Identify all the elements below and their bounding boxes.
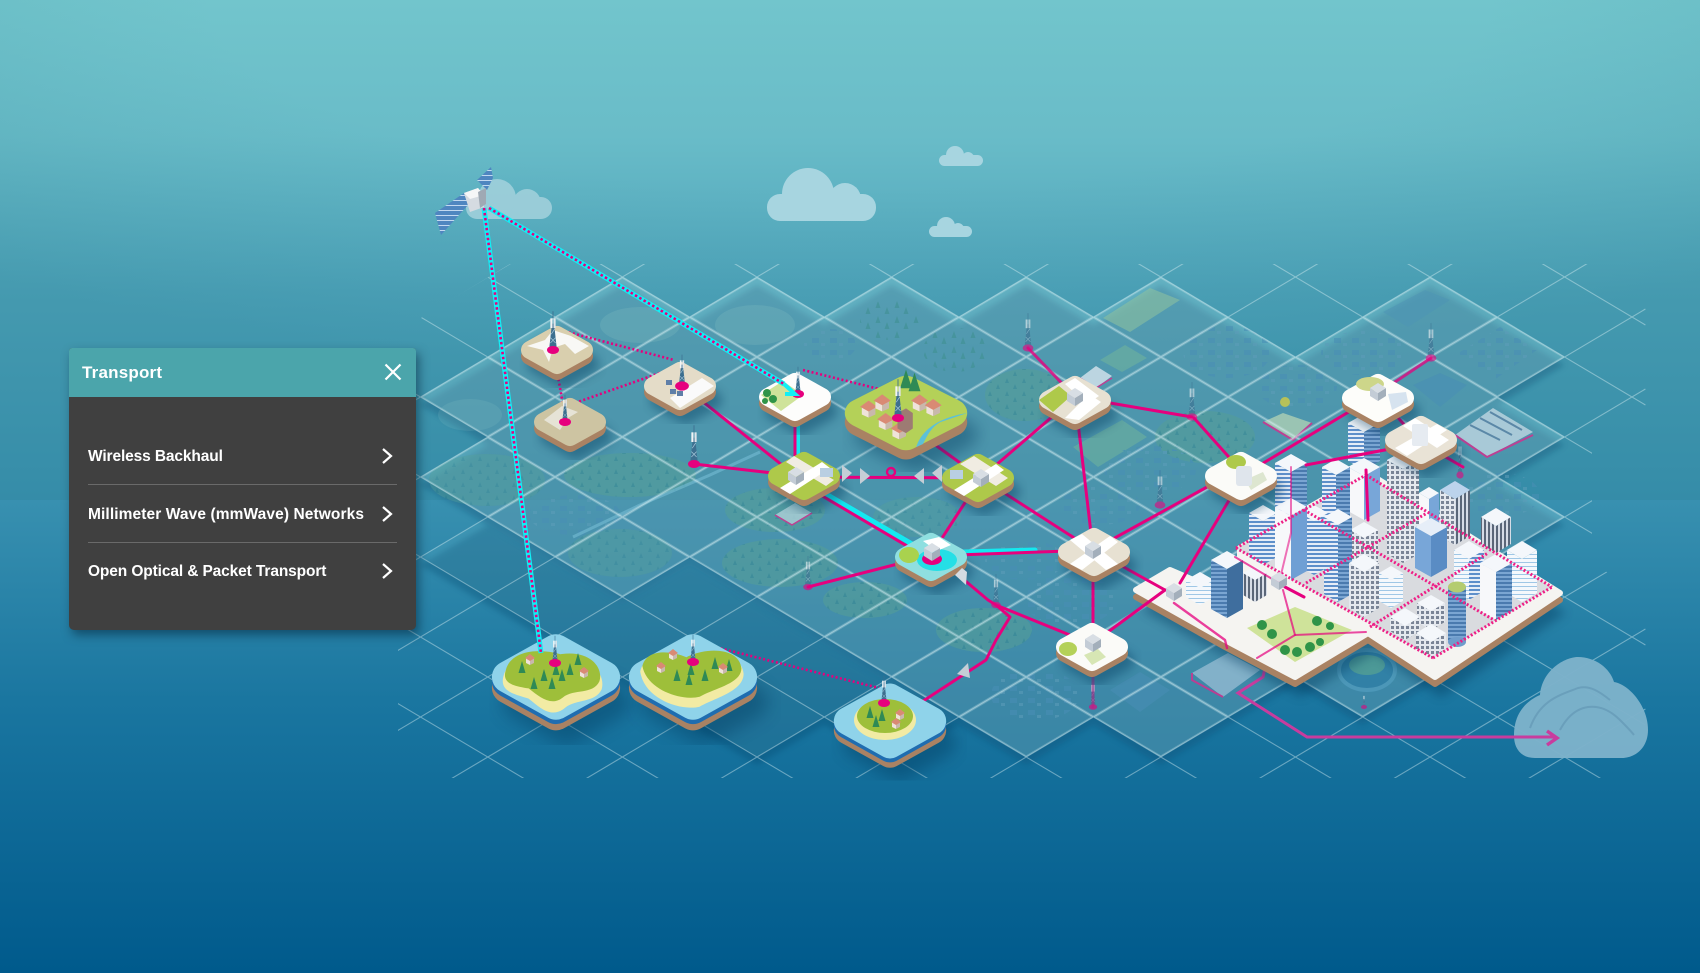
island 3 — [848, 676, 941, 766]
link node: M — [1214, 455, 1274, 505]
tower: free standing — [688, 425, 700, 468]
link node: J — [1067, 534, 1127, 581]
menu item: Millimeter Wave: Millimeter Wave (mmWave) Networks — [88, 506, 364, 523]
grid lines — [370, 261, 1645, 789]
island 1 — [503, 636, 615, 729]
cloud: small lower — [929, 217, 972, 237]
tile: mountain A — [527, 311, 590, 379]
land patches on tiles — [429, 288, 1540, 721]
amplifier: over water — [957, 663, 970, 678]
tile: C with homes — [653, 355, 714, 415]
grid lines on plates — [421, 277, 1564, 757]
island 2 — [640, 635, 752, 729]
city buildings — [1186, 414, 1537, 658]
amplifier: lower — [955, 568, 967, 585]
amplifier row — [820, 465, 963, 484]
link node: I hub — [899, 537, 964, 586]
tile: mountain B — [543, 395, 603, 451]
link node: K — [1059, 632, 1125, 676]
menu item: Open Optical: Open Optical & Packet Transport — [88, 563, 326, 580]
panel: Transport menu — [69, 348, 416, 630]
link node: L — [1039, 378, 1108, 429]
icon: satellite — [435, 167, 493, 235]
cloud: data cloud destination — [1514, 657, 1648, 758]
heading: Transport: Transport — [82, 363, 162, 382]
faded facilities on tiles — [775, 366, 1533, 697]
panel header — [69, 348, 416, 397]
cloud: behind satellite — [466, 179, 552, 219]
icon: close — [384, 364, 402, 380]
water tile plate — [420, 517, 959, 765]
link node: H — [951, 456, 1011, 507]
city plate — [1136, 473, 1566, 697]
river — [573, 452, 760, 537]
dotted microwave links — [553, 330, 891, 688]
link node: N — [1351, 377, 1411, 427]
city node Q — [1271, 572, 1287, 590]
tile: village E — [860, 370, 967, 458]
satellite beam: to island — [484, 208, 541, 653]
tower: E — [892, 379, 904, 422]
link: factory to cloud arrow — [1238, 668, 1557, 745]
satellite beam: to tower — [489, 208, 795, 394]
menu item: Wireless Backhaul — [88, 448, 393, 465]
faded relay towers — [803, 313, 1464, 710]
cloud: large — [767, 168, 876, 221]
city node P — [1166, 583, 1182, 601]
network links — [682, 348, 1463, 707]
cloud: small top — [939, 146, 983, 166]
link node: O — [1394, 418, 1454, 469]
city dotted street grid — [1236, 475, 1552, 658]
city park — [1247, 607, 1352, 662]
cyan links — [795, 394, 1093, 559]
tile: D with tower — [761, 367, 828, 426]
link node: G — [777, 456, 837, 505]
land tile plate — [420, 277, 1565, 765]
menu item: Wireless Backhaul: Wireless Backhaul — [88, 448, 223, 465]
